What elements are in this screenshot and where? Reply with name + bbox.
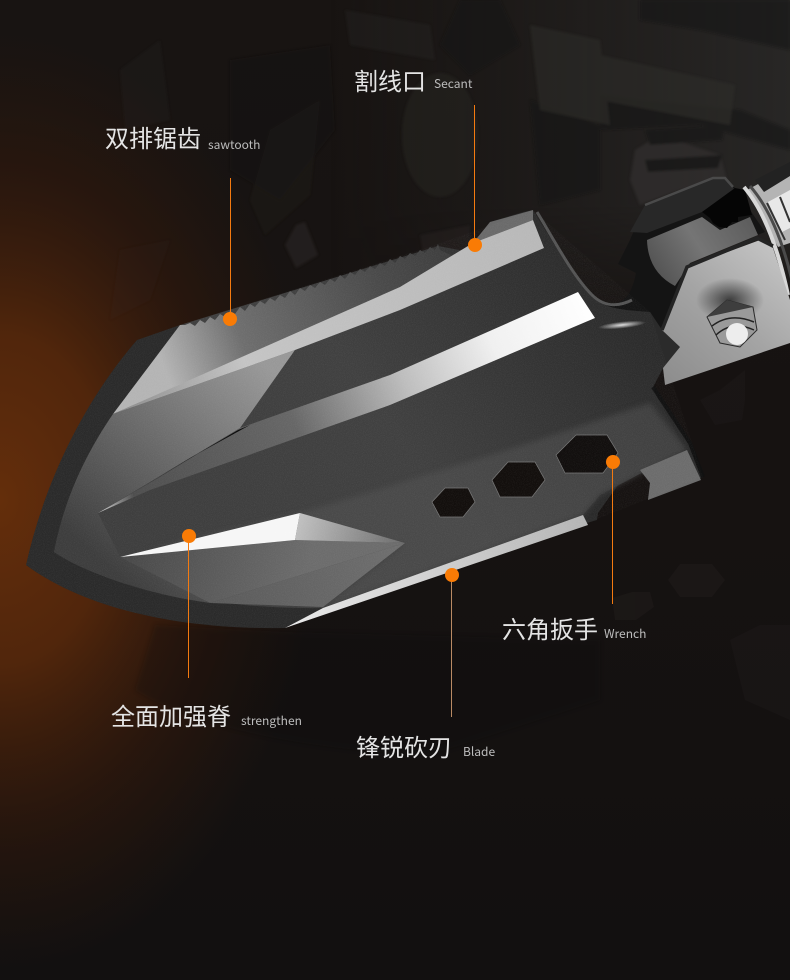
ear defender (402, 73, 478, 197)
shovel blade (26, 210, 703, 628)
centre ridge (98, 292, 595, 513)
rifle body (440, 0, 790, 205)
lower facet (210, 543, 405, 607)
tang side edge (653, 387, 703, 477)
glove straps (645, 125, 725, 172)
top right facet (473, 210, 533, 243)
rifle light parts (345, 10, 735, 125)
main face (54, 212, 685, 608)
camouflage spots (110, 40, 470, 320)
diamond white face (120, 513, 300, 557)
ghosted hexagons (612, 370, 790, 720)
label en: sawtooth (208, 136, 260, 153)
bright band upper (113, 220, 544, 414)
rod dark band (755, 162, 790, 192)
callout: wrench (502, 455, 646, 644)
handle bracket back plate (597, 178, 765, 345)
dot (182, 529, 196, 543)
metal grain (26, 210, 703, 628)
plate top edge (662, 238, 773, 330)
upper plate face (630, 178, 735, 233)
lower right lighter panel (150, 403, 687, 608)
ghosted soldier and rifle backdrop (110, 0, 790, 320)
hex hole medium (492, 462, 545, 497)
dot (606, 455, 620, 469)
callout: strengthen (111, 529, 302, 731)
mottled inner (647, 217, 758, 286)
rod separators (767, 197, 790, 240)
top facet (113, 243, 478, 414)
bolt hex top faces (707, 300, 753, 317)
label cn: 锋锐砍刃 (356, 735, 452, 762)
label cn: 全面加强脊 (111, 704, 231, 731)
neck highlight (598, 319, 646, 331)
leader line (612, 462, 614, 604)
socket edge (537, 212, 632, 305)
dot (223, 312, 237, 326)
callout: sawtooth (105, 126, 260, 326)
hex hole small (432, 488, 475, 517)
handle rod (744, 162, 790, 295)
label en: Blade (463, 743, 495, 760)
helmet shadow (230, 45, 335, 200)
label en: Secant (434, 75, 473, 92)
black teeth (702, 188, 752, 228)
glove (630, 135, 727, 205)
ghosted blade shadow (135, 625, 600, 755)
label en: Wrench (604, 625, 646, 642)
rod collar (744, 187, 788, 295)
leader line (450, 575, 452, 717)
label cn: 六角扳手 (502, 617, 598, 644)
bolt shadow (696, 278, 764, 322)
dot (468, 238, 482, 252)
left facet (54, 350, 295, 603)
handle plate with bolt (662, 238, 790, 385)
bolt thread (712, 318, 754, 335)
plate rim (645, 178, 733, 205)
cutting edge strip (285, 515, 588, 628)
dot (445, 568, 459, 582)
leader line (188, 536, 190, 678)
lower mid facet (120, 540, 405, 603)
bolt hex (707, 300, 757, 347)
callout: blade (356, 568, 495, 762)
label cn: 双排锯齿 (105, 126, 201, 153)
bolt top (726, 323, 748, 345)
diamond gray face (295, 513, 405, 543)
rod white segment (768, 190, 790, 232)
callout: secant (354, 69, 482, 252)
hex hole large (556, 435, 618, 473)
leader line (230, 178, 232, 318)
label cn: 割线口 (354, 69, 426, 96)
ridge groove shadow (160, 425, 250, 476)
blade silhouette (26, 210, 703, 628)
leader line (474, 105, 476, 245)
label en: strengthen (241, 712, 302, 729)
tang highlight (640, 450, 701, 500)
